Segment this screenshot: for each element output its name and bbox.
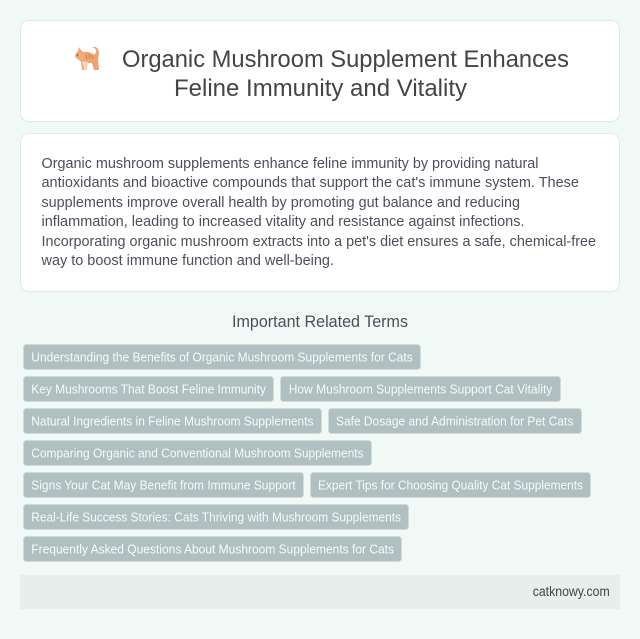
chip: how supplements support vitality	[280, 376, 560, 402]
icon: cat	[75, 47, 99, 70]
chip: natural ingredients: Natural Ingredients in Feline Mushroom Supplements	[31, 414, 314, 428]
chip: how supplements support vitality: How Mushroom Supplements Support Cat Vitality	[289, 382, 553, 396]
chip: understanding benefits	[24, 344, 420, 370]
title text	[122, 46, 569, 102]
summary text: way to boost immune function and well-being.	[41, 252, 334, 269]
chip: signs: Signs Your Cat May Benefit from Immune Support	[31, 478, 296, 492]
chip: expert tips	[310, 472, 590, 498]
chip: understanding benefits: Understanding the Benefits of Organic Mushroom Supplements for Cats	[31, 350, 413, 364]
title text: Feline Immunity and Vitality	[174, 75, 468, 102]
title text: Organic Mushroom Supplement Enhances	[122, 46, 569, 73]
summary text: supplements improve overall health by promoting gut balance and reducing	[42, 194, 520, 211]
chip: success stories: Real-Life Success Stories: Cats Thriving with Mushroom Supplements	[31, 510, 401, 524]
heading: related terms: Important Related Terms	[232, 313, 408, 331]
footer	[20, 575, 620, 609]
chip: signs	[24, 472, 304, 498]
chip: natural ingredients	[24, 408, 322, 434]
summary text: Incorporating organic mushroom extracts into a pet's diet ensures a safe, chemical-free	[42, 233, 596, 250]
chip: comparing organic: Comparing Organic and Conventional Mushroom Supplements	[31, 446, 364, 460]
footer site name: catknowy.com	[533, 584, 610, 599]
summary text: antioxidants and bioactive compounds that support the cat's immune system. These	[42, 174, 579, 191]
chip: faq: Frequently Asked Questions About Mushroom Supplements for Cats	[31, 542, 394, 556]
panel: title	[20, 20, 620, 122]
chip: faq	[24, 536, 402, 562]
chip: safe dosage: Safe Dosage and Administration for Pet Cats	[336, 414, 574, 428]
chip: key mushrooms	[24, 376, 274, 402]
chip: success stories	[24, 504, 408, 530]
chip: expert tips: Expert Tips for Choosing Quality Cat Supplements	[318, 478, 583, 492]
summary text	[41, 155, 596, 269]
chip: key mushrooms: Key Mushrooms That Boost Feline Immunity	[31, 382, 266, 396]
related term chips	[24, 344, 590, 562]
chip: comparing organic	[24, 440, 372, 466]
summary text: inflammation, leading to increased vitality and resistance against infections.	[42, 213, 524, 230]
summary text: Organic mushroom supplements enhance feline immunity by providing natural	[42, 155, 538, 172]
panel: summary	[20, 134, 620, 292]
chip: safe dosage	[328, 408, 582, 434]
